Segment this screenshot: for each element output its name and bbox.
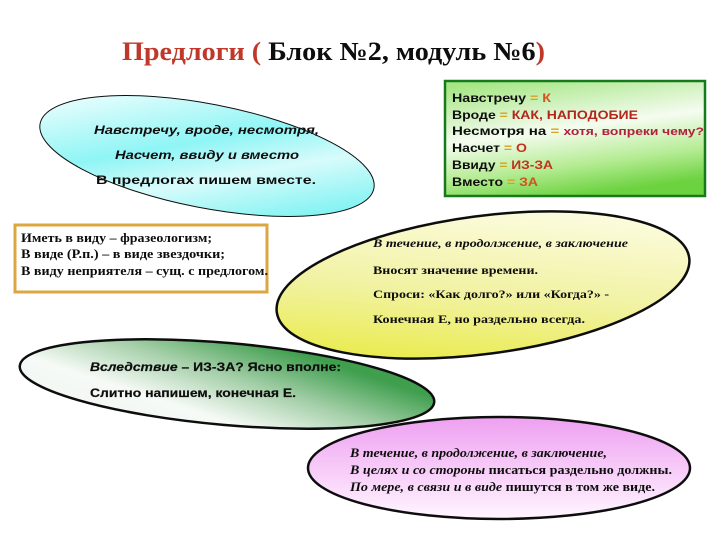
text: definitions list: Вместо = ЗА (452, 175, 538, 189)
text: cyan ellipse lines: Насчет, ввиду и вместо (115, 148, 299, 162)
text: cyan ellipse lines (94, 123, 319, 187)
panel: orange phraseology box (15, 225, 268, 292)
text: yellow ellipse lines: Спроси: «Как долго?» или «Когда?» - (373, 287, 609, 301)
text: green ellipse lines (90, 360, 341, 400)
text: phraseology lines: В виду неприятеля – сущ. с предлогом. (21, 264, 268, 278)
text: definitions list: Вроде = КАК, НАПОДОБИЕ (452, 108, 638, 122)
panel: green ellipse, вследствие (16, 325, 438, 443)
text: pink ellipse lines: В целях и со стороны писаться раздельно должны. (349, 463, 672, 477)
text: phraseology lines: Иметь в виду – фразеологизм; (21, 231, 212, 245)
text: definitions list: Ввиду = ИЗ-ЗА (452, 158, 553, 172)
panel: yellow ellipse, time meaning (268, 189, 698, 381)
text: phraseology lines (21, 231, 268, 278)
text: definitions list (452, 91, 704, 189)
text: pink ellipse lines (349, 446, 672, 494)
text: cyan ellipse lines: Навстречу, вроде, несмотря, (94, 123, 319, 137)
text: yellow ellipse lines: В течение, в продолжение, в заключение (372, 236, 629, 250)
text: yellow ellipse lines (372, 236, 629, 326)
text: green ellipse lines: Вследствие – ИЗ-ЗА? Ясно вполне: (90, 360, 341, 374)
title: Предлоги ( Блок №2, модуль №6 ) (122, 37, 545, 66)
text: pink ellipse lines: По мере, в связи и в виде пишутся в том же виде. (349, 480, 655, 494)
text: cyan ellipse lines: В предлогах пишем вместе. (96, 173, 316, 187)
panel: pink ellipse, separate and together spelling (308, 417, 690, 519)
text: definitions list: Несмотря на = хотя, вопреки чему? (452, 124, 704, 138)
text: definitions list: Насчет = О (452, 141, 527, 155)
text: phraseology lines: В виде (Р.п.) – в виде звездочки; (21, 247, 225, 261)
text: definitions list: Навстречу = К (452, 91, 552, 105)
text: yellow ellipse lines: Конечная Е, но раздельно всегда. (373, 312, 585, 326)
text: pink ellipse lines: В течение, в продолжение, в заключение, (349, 446, 607, 460)
text: green ellipse lines: Слитно напишем, конечная Е. (90, 386, 296, 400)
panel: cyan ellipse, prepositions written together (30, 73, 384, 239)
text: yellow ellipse lines: Вносят значение времени. (373, 263, 538, 277)
panel: green definitions box (445, 81, 705, 196)
